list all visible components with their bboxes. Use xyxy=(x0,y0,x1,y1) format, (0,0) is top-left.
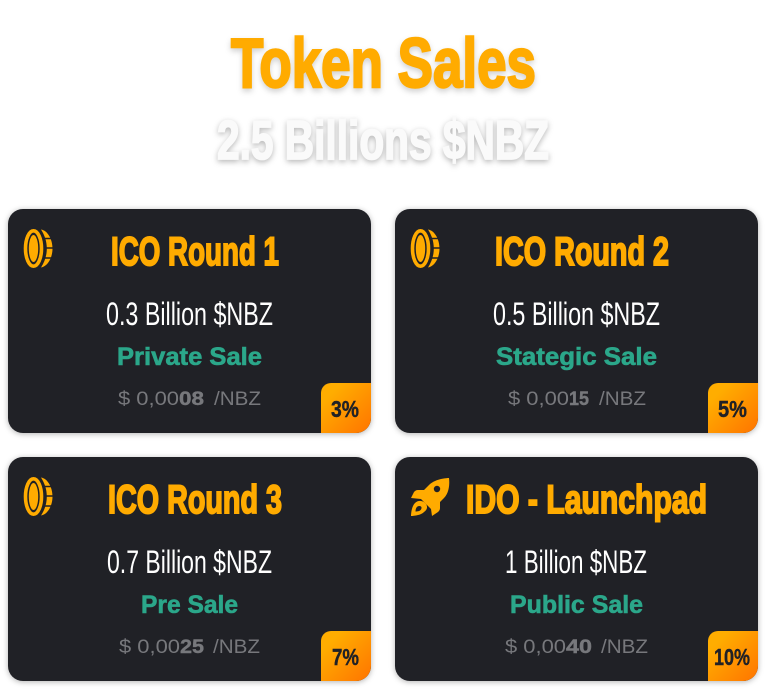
price: $ 0,00 xyxy=(118,389,179,410)
price: /NBZ xyxy=(599,389,646,410)
price: $ 0,00 xyxy=(508,389,569,410)
percentage badge xyxy=(708,631,758,681)
sale type: Stategic Sale xyxy=(496,343,657,371)
sale type: Public Sale xyxy=(510,591,643,619)
percentage badge xyxy=(708,383,758,433)
price xyxy=(505,637,648,658)
price xyxy=(119,637,260,658)
percentage badge xyxy=(321,631,371,681)
card heading: ICO Round 1 xyxy=(111,230,279,274)
price: /NBZ xyxy=(213,637,260,658)
price: 08 xyxy=(179,389,204,410)
icon: rocket xyxy=(411,478,449,516)
price: 15 xyxy=(569,389,589,410)
price: /NBZ xyxy=(601,637,648,658)
panel: IDO Launchpad xyxy=(395,457,758,681)
token amount: 0.7 Billion $NBZ xyxy=(107,544,272,580)
percentage badge: 7% xyxy=(332,644,359,670)
title: Token Sales xyxy=(231,24,536,102)
token amount: 0.5 Billion $NBZ xyxy=(493,296,660,332)
price: $ 0,00 xyxy=(119,637,180,658)
percentage badge xyxy=(321,383,371,433)
subtitle: 2.5 Billions $NBZ xyxy=(217,109,549,171)
price xyxy=(508,389,646,410)
sale type: Private Sale xyxy=(117,343,262,371)
percentage badge: 5% xyxy=(718,396,747,422)
price: /NBZ xyxy=(214,389,261,410)
price: 40 xyxy=(566,637,592,658)
card heading: ICO Round 2 xyxy=(495,230,669,274)
price: $ 0,00 xyxy=(505,637,566,658)
price xyxy=(118,389,261,410)
card heading: ICO Round 3 xyxy=(108,478,282,522)
icon: coin xyxy=(26,230,53,268)
icon: coin xyxy=(412,230,440,268)
sale type: Pre Sale xyxy=(141,591,238,619)
token amount: 1 Billion $NBZ xyxy=(505,544,647,580)
icon: coin xyxy=(26,478,53,516)
percentage badge: 3% xyxy=(331,396,359,422)
price: 25 xyxy=(180,637,204,658)
panel: ICO Round 1 xyxy=(8,209,371,433)
token amount: 0.3 Billion $NBZ xyxy=(106,296,273,332)
panel: ICO Round 2 xyxy=(395,209,758,433)
panel: ICO Round 3 xyxy=(8,457,371,681)
percentage badge: 10% xyxy=(714,644,750,670)
